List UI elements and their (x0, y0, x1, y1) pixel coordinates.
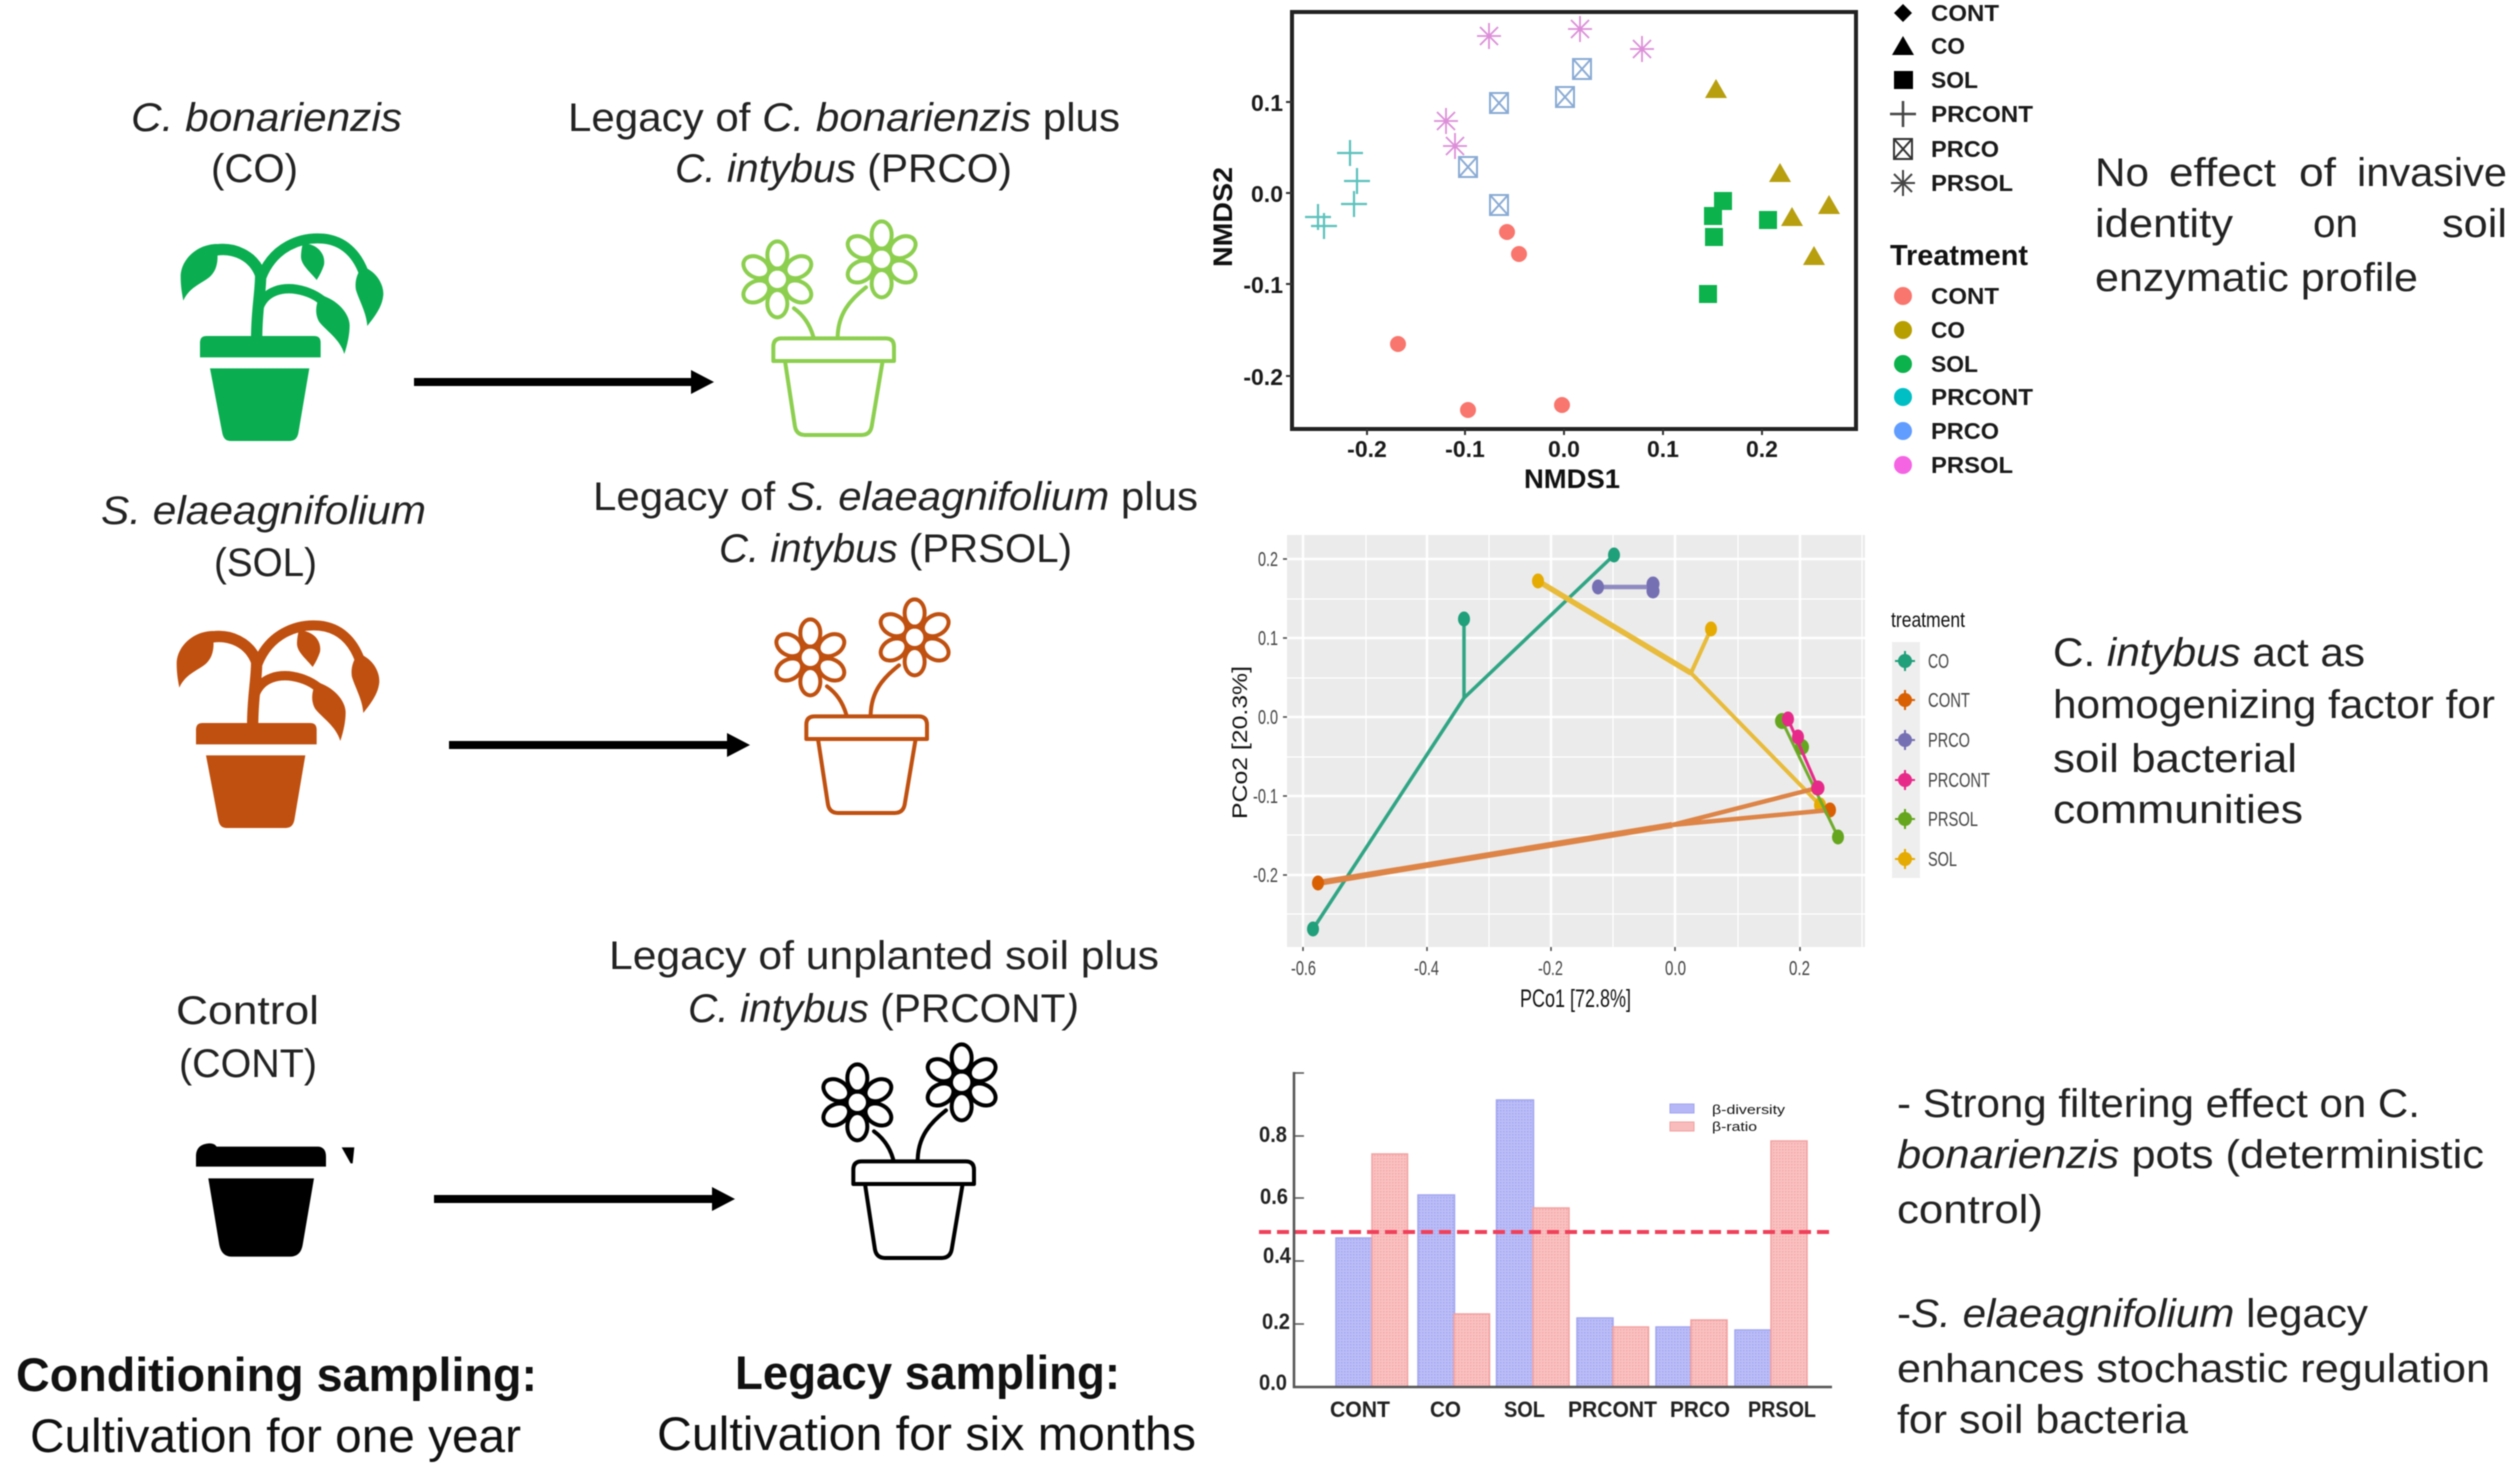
PCoA axis labels: -0.4 (1414, 958, 1439, 980)
text: NMDS finding: No (2095, 151, 2149, 195)
NMDS axis ticks and labels: -0.1 (1243, 272, 1283, 298)
bar chart legend: β-ratio (1712, 1119, 1757, 1134)
text: NMDS finding: effect (2169, 151, 2276, 195)
legend: treatment: SOL (1928, 849, 1957, 871)
PCoA axis labels (1229, 549, 1810, 1013)
icon: black flowers in pot (819, 1044, 1000, 1258)
caption: conditioning sampling (16, 1348, 537, 1462)
text: bar chart findings: bonarienzis pots (deterministic (1897, 1133, 2484, 1177)
series: PRCO spider (1592, 576, 1660, 598)
legend: shapes: SOL (1931, 67, 1978, 93)
legend: treatment colours: CONT (1931, 283, 1999, 309)
panel: experimental design (16, 96, 1198, 1462)
points: PRCO crossed squares (1459, 59, 1591, 215)
blue bars: beta diversity (1336, 1100, 1771, 1387)
text: bar chart findings: control) (1897, 1188, 2043, 1232)
legend: treatment colours: PRCO (1931, 418, 1999, 444)
text: PCoA finding (2053, 631, 2495, 832)
points: CONT circles (1390, 224, 1570, 418)
y axis labels: 0.4 (1263, 1243, 1292, 1268)
PCoA axis labels: 0.1 (1258, 628, 1278, 650)
points: PRSOL asterisks (1434, 16, 1654, 159)
NMDS axis ticks and labels (1208, 90, 1778, 494)
text: PCoA finding: communities (2053, 788, 2303, 832)
label: C. bonarienzis (CO): (CO) (211, 147, 298, 191)
label: legacy PRSOL: C. intybus (PRSOL) (719, 527, 1072, 571)
legend: treatment: PRCONT (1928, 770, 1990, 792)
icon: wilted green plant (181, 238, 383, 441)
legend: treatment: CO (1928, 651, 1949, 673)
legend: shapes: CO (1931, 33, 1965, 59)
NMDS axis ticks and labels: -0.2 (1243, 364, 1283, 390)
legend: treatment colours: CO (1931, 317, 1965, 343)
text: bar chart findings (1897, 1082, 2490, 1442)
legend: shapes (1890, 0, 2033, 196)
chart: NMDS enzymatic profile (1208, 0, 2033, 494)
PCoA axis labels: PCo2 [20.3%] (1229, 666, 1252, 819)
label: Control (CONT) (176, 989, 319, 1086)
text: NMDS finding: on (2313, 202, 2358, 246)
bar chart legend: β-diversity (1712, 1102, 1786, 1117)
points: CO triangles (1705, 79, 1840, 265)
series: PRSOL spider (1775, 713, 1844, 844)
legend: treatment: PRCO (1928, 730, 1970, 752)
NMDS axis ticks and labels: -0.2 (1347, 436, 1387, 462)
legend: treatment colours: Treatment (1890, 240, 2028, 272)
category labels: PRSOL (1748, 1397, 1816, 1422)
text: NMDS finding: of (2299, 151, 2337, 195)
legend: shapes: PRSOL (1931, 170, 2013, 196)
icon: wilted orange plant (177, 625, 379, 828)
text: NMDS finding: soil (2442, 202, 2507, 246)
series: CO spider (1307, 548, 1620, 936)
category labels: CO (1430, 1397, 1461, 1422)
label: Control (CONT): Control (176, 989, 319, 1033)
legend: treatment: PRSOL (1928, 809, 1978, 831)
series: CONT spider (1312, 780, 1836, 890)
legend: treatment colours: SOL (1931, 351, 1978, 377)
label: S. elaeagnifolium (SOL): S. elaeagnifolium (101, 489, 426, 533)
label: legacy PRSOL: Legacy of S. elaeagnifolium plus (593, 475, 1198, 519)
points: PRCONT plus signs (1305, 140, 1370, 239)
label: legacy PRCONT (609, 934, 1159, 1031)
category labels: CONT (1330, 1397, 1391, 1422)
text: PCoA finding: homogenizing factor for (2053, 683, 2495, 727)
legend: treatment: CONT (1928, 690, 1970, 712)
y axis labels: 0.6 (1260, 1184, 1288, 1209)
y axis labels: 0.2 (1262, 1309, 1290, 1334)
bar chart axes (1294, 1072, 1832, 1387)
NMDS axis ticks and labels: 0.1 (1647, 436, 1679, 462)
icon: light green flowers in pot (739, 221, 920, 435)
legend: treatment colours: PRSOL (1931, 452, 2013, 478)
red bars: beta ratio (1372, 1141, 1807, 1387)
bar chart legend (1670, 1102, 1786, 1134)
text: NMDS finding: identity (2095, 202, 2233, 246)
NMDS axis ticks and labels: NMDS2 (1208, 167, 1238, 267)
legend: treatment colours (1890, 240, 2033, 478)
text: bar chart findings: for soil bacteria (1897, 1398, 2189, 1442)
text: bar chart findings: -S. elaeagnifolium legacy (1897, 1292, 2368, 1336)
legend: treatment colours: PRCONT (1931, 384, 2033, 410)
text: NMDS finding: enzymatic profile (2095, 256, 2418, 300)
PCoA axis labels: -0.1 (1253, 786, 1278, 808)
y axis labels (1259, 1122, 1292, 1395)
plot frame (1292, 12, 1856, 429)
chart: beta diversity and beta ratio bars (1259, 1072, 1833, 1422)
PCoA axis labels: -0.2 (1253, 865, 1278, 887)
label: legacy PRCO: Legacy of C. bonarienzis plus (568, 96, 1120, 140)
icon: black unplanted pot (196, 1143, 354, 1257)
threshold dashed line (1259, 1230, 1833, 1234)
points: SOL squares (1699, 192, 1777, 303)
text: bar chart findings: - Strong filtering effect on C. (1897, 1082, 2420, 1126)
NMDS axis ticks and labels: 0.0 (1251, 181, 1283, 207)
text: bar chart findings: enhances stochastic regulation (1897, 1347, 2490, 1391)
PCoA axis labels: 0.0 (1665, 958, 1686, 980)
PCoA axis labels: PCo1 [72.8%] (1520, 985, 1631, 1013)
label: legacy PRCONT: C. intybus (PRCONT) (688, 987, 1079, 1031)
PCoA axis labels: -0.2 (1538, 958, 1563, 980)
legend: shapes: PRCO (1931, 136, 1999, 162)
icon: orange flowers in pot (772, 599, 953, 813)
arrow: CONT to PRCONT (434, 1187, 735, 1211)
arrow: SOL to PRSOL (449, 733, 750, 757)
caption: legacy sampling (657, 1346, 1196, 1460)
y axis labels: 0.8 (1259, 1122, 1287, 1147)
y axis labels: 0.0 (1259, 1370, 1287, 1395)
label: legacy PRCO (568, 96, 1120, 191)
category labels: PRCONT (1568, 1397, 1658, 1422)
NMDS axis ticks and labels: 0.2 (1746, 436, 1778, 462)
PCoA axis labels: -0.6 (1291, 958, 1316, 980)
NMDS axis ticks and labels: NMDS1 (1524, 464, 1620, 494)
legend: shapes: PRCONT (1931, 101, 2033, 127)
category labels (1330, 1397, 1816, 1422)
caption: legacy sampling: Cultivation for six months (657, 1407, 1196, 1460)
series: PRCONT spider (1782, 712, 1824, 796)
label: legacy PRCO: C. intybus (PRCO) (675, 147, 1012, 191)
text: NMDS finding (2095, 151, 2507, 300)
PCoA axis labels: 0.0 (1258, 707, 1278, 729)
PCoA axis labels: 0.2 (1258, 549, 1278, 571)
legend: treatment (1891, 609, 1990, 878)
NMDS axis ticks and labels: 0.0 (1548, 436, 1580, 462)
text: PCoA finding: C. intybus act as (2053, 631, 2365, 675)
legend: shapes: CONT (1931, 0, 1999, 26)
NMDS axis ticks and labels: 0.1 (1251, 90, 1283, 116)
label: S. elaeagnifolium (SOL) (101, 489, 426, 585)
legend: treatment: treatment (1891, 609, 1965, 632)
label: C. bonarienzis (CO): C. bonarienzis (131, 96, 402, 140)
text: NMDS finding: invasive (2357, 151, 2507, 195)
caption: conditioning sampling: Conditioning sampling: (16, 1348, 537, 1401)
label: C. bonarienzis (CO) (131, 96, 402, 191)
text: PCoA finding: soil bacterial (2053, 737, 2297, 781)
plot panel (1287, 535, 1865, 947)
series: SOL spider (1532, 574, 1826, 812)
caption: conditioning sampling: Cultivation for one year (30, 1409, 521, 1462)
caption: legacy sampling: Legacy sampling: (735, 1346, 1120, 1399)
label: S. elaeagnifolium (SOL): (SOL) (214, 541, 317, 585)
PCoA axis labels: 0.2 (1789, 958, 1810, 980)
label: legacy PRSOL (593, 475, 1198, 571)
category labels: PRCO (1670, 1397, 1730, 1422)
arrow: CO to PRCO (414, 370, 714, 394)
chart: PCoA bacterial communities (1229, 535, 1990, 1013)
label: legacy PRCONT: Legacy of unplanted soil plus (609, 934, 1159, 978)
NMDS axis ticks and labels: -0.1 (1445, 436, 1485, 462)
label: Control (CONT): (CONT) (179, 1042, 317, 1086)
category labels: SOL (1504, 1397, 1545, 1422)
